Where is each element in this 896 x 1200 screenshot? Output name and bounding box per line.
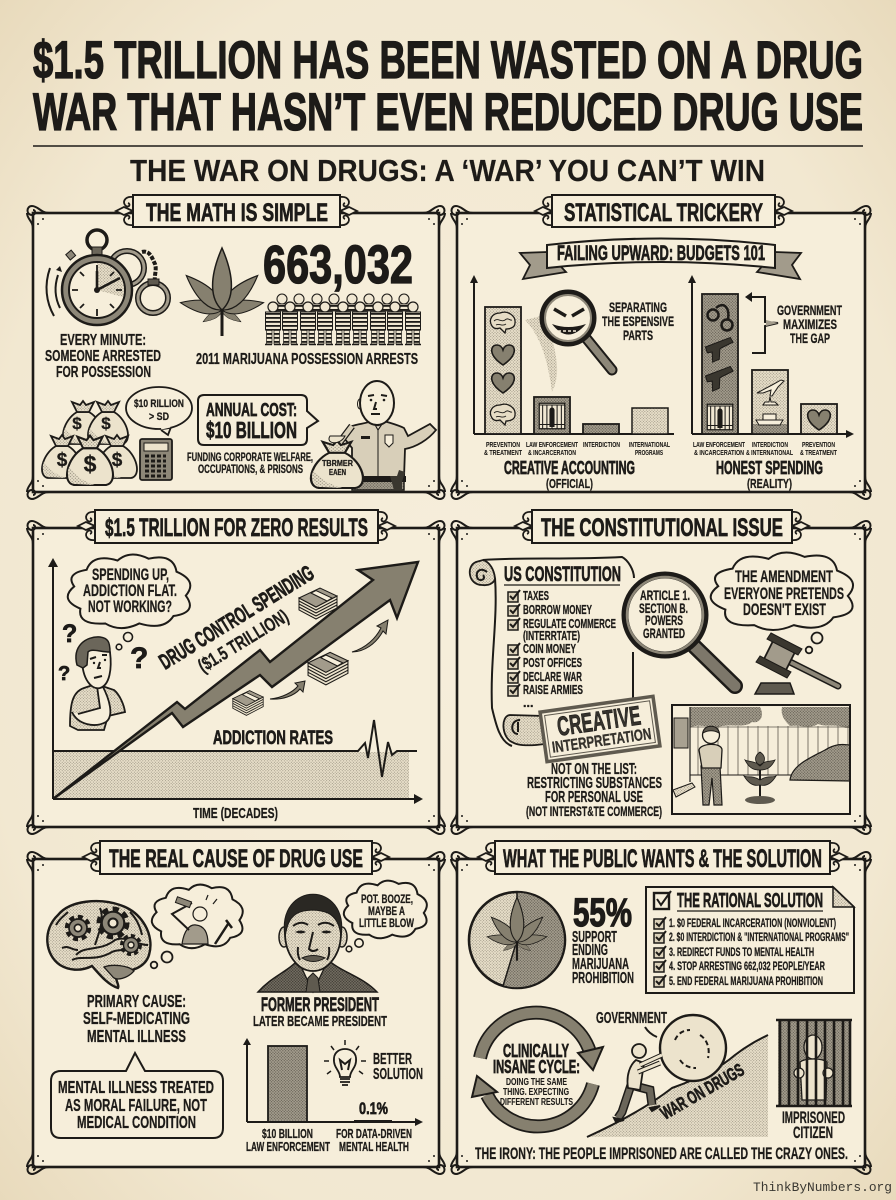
stat: 55% support: PROHIBITION [572, 970, 634, 987]
heading: the math is simple: THE MATH IS SIMPLE [146, 199, 328, 227]
text: not on the list: (NOT INTERST&TE COMMERCE) [526, 803, 662, 819]
thought bubble: pot booze: LITTLE BLOW [359, 916, 414, 930]
icon: light bulb better solution: SOLUTION [373, 1066, 423, 1083]
stat: 55% support: MARIJUANA [572, 956, 629, 973]
thought bubble: the amendment: DOESN'T EXIST [743, 600, 826, 619]
thought bubble: the amendment [711, 552, 853, 653]
icon: police officer with money bag [311, 381, 436, 490]
caption: imprisoned citizen [782, 1109, 845, 1142]
stat: 55% support: SUPPORT [572, 929, 617, 946]
panel: statistical trickery [451, 195, 871, 499]
icon: confused person [58, 620, 148, 730]
chart: 55% pie with leaf [469, 892, 565, 988]
caption: honest spending [716, 458, 823, 491]
heading: statistical trickery [535, 195, 792, 227]
caption: funding: OCCUPATIONS, & PRISONS [198, 462, 303, 476]
bracket arrow: maximizes the gap [745, 292, 778, 353]
caption: funding: FUNDING CORPORATE WELFARE, [187, 450, 313, 464]
panel: the constitutional issue [451, 510, 871, 834]
scroll: us constitution: US CONSTITUTION [504, 563, 621, 586]
icon: marijuana leaf [179, 248, 265, 336]
thought bubble: pot booze: MAYBE A [368, 904, 405, 918]
document: the rational solution [646, 887, 854, 993]
heading: the real cause of drug use: THE REAL CAUSE OF DRUG USE [109, 845, 363, 873]
thought bubble: spending up [68, 554, 190, 650]
source credit: ThinkByNumbers.org [753, 1180, 892, 1195]
caption: funding [187, 450, 313, 476]
label: addiction rates: ADDICTION RATES [213, 728, 333, 749]
thought bubble: pot booze [344, 881, 427, 952]
scroll: us constitution: (INTERRTATE) [523, 629, 580, 643]
scroll: us constitution: RAISE ARMIES [523, 683, 583, 697]
labels: left chart axis: LAW ENFORCEMENT [526, 440, 578, 449]
labels: right chart axis: LAW ENFORCEMENT [693, 440, 745, 449]
icon: money bags: $ [57, 450, 68, 471]
diagram: clinically insane cycle [472, 1013, 603, 1126]
text: not on the list [526, 761, 662, 819]
labels: left chart axis: PREVENTION [486, 440, 520, 449]
thought bubble: spending up: NOT WORKING? [88, 597, 172, 616]
caption: honest spending: (REALITY) [747, 476, 792, 491]
icon: calculator [140, 439, 172, 480]
icon: money bags: $ [84, 451, 97, 477]
text: not on the list: RESTRICTING SUBSTANCES [527, 775, 662, 792]
arrow: drug control spending [53, 562, 418, 799]
icon: brain with gears [47, 901, 150, 988]
icon: police officer with money bag: EAEN [329, 468, 346, 477]
scroll: us constitution: POST OFFICES [523, 656, 582, 670]
stamp: creative interpretation: CREATIVE [555, 700, 643, 742]
scroll: us constitution: ... [523, 696, 533, 710]
caption: imprisoned citizen: IMPRISONED [782, 1109, 845, 1127]
labels: right chart axis: & INCARCERATION [694, 448, 744, 457]
icon: stopwatch with handcuffs [47, 230, 168, 325]
stamp: creative interpretation [540, 696, 660, 762]
caption: every minute: EVERY MINUTE: [60, 332, 146, 349]
chart: law enforcement vs mental health: LAW ENFORCEMENT [246, 1139, 330, 1154]
labels: left chart axis: & INCARCERATION [528, 448, 576, 457]
chart: law enforcement vs mental health: 0.1% [359, 1099, 388, 1118]
caption: creative accounting: CREATIVE ACCOUNTING [504, 458, 635, 478]
scroll: us constitution: REGULATE COMMERCE [523, 617, 616, 631]
heading: the math is simple [116, 195, 357, 227]
caption: every minute: FOR POSSESSION [56, 364, 151, 381]
labels: right chart axis [693, 440, 837, 457]
subtitle: THE WAR ON DRUGS: A ‘WAR’ YOU CAN’T WIN [130, 153, 765, 188]
thought bubble: self medication [151, 885, 243, 968]
callout: mental illness treated: MENTAL ILLNESS TREATED [58, 1077, 214, 1097]
heading: the real cause of drug use [83, 841, 389, 874]
scroll: us constitution: BORROW MONEY [523, 603, 592, 617]
callout: annual cost: $10 BILLION [206, 417, 297, 443]
thought bubble: pot booze: POT. BOOZE, [361, 892, 413, 906]
label: separating: SEPARATING [609, 299, 667, 315]
heading: $1.5 trillion for zero results: $1.5 TRILLION FOR ZERO RESULTS [105, 514, 368, 542]
icon: police officer with money bag: TBRMER [322, 459, 353, 468]
diagram: clinically insane cycle: THING. EXPECTING [503, 1087, 569, 1098]
label: separating: PARTS [623, 327, 653, 343]
label: separating [602, 299, 674, 343]
caption: former president: FORMER PRESIDENT [261, 995, 379, 1016]
caption: former president [253, 995, 387, 1030]
callout: mental illness treated [51, 1053, 223, 1138]
labels: left chart axis: & TREATMENT [484, 448, 522, 457]
illustration: backyard plant [672, 705, 850, 814]
label: government maximizes the gap: THE GAP [790, 330, 830, 346]
label: government maximizes the gap: MAXIMIZES [783, 316, 837, 332]
icon: light bulb better solution: BETTER [373, 1051, 412, 1068]
labels: left chart axis [484, 440, 670, 457]
thought bubble: the amendment: THE AMENDMENT [735, 567, 833, 586]
labels: left chart axis: PROGRAMS [635, 448, 663, 457]
labels: left chart axis: INTERNATIONAL [629, 440, 670, 449]
caption: marijuana arrests: 2011 MARIJUANA POSSESSION ARRESTS [196, 351, 418, 368]
stat: 55% support: ENDING [572, 942, 608, 959]
chart: law enforcement vs mental health: FOR DATA-DRIVEN [336, 1126, 412, 1141]
chart: law enforcement vs mental health [243, 1038, 423, 1154]
diagram: clinically insane cycle: DOING THE SAME [506, 1077, 567, 1088]
icon: magnifier on article 1: SECTION B. [639, 601, 688, 616]
heading: statistical trickery: STATISTICAL TRICKERY [564, 199, 763, 227]
label: drug control spending: ($1.5 TRILLION) [195, 606, 293, 677]
speech bubble: $10 rillion [126, 387, 192, 435]
caption: primary cause: SELF-MEDICATING [83, 1008, 190, 1028]
icon: magnifier with grinning face [525, 292, 612, 392]
chart: law enforcement vs mental health: $10 BILLION [262, 1126, 313, 1141]
stat: 55% support [572, 891, 634, 987]
illustration: sisyphus pushing boulder [587, 1015, 768, 1137]
chart: spending vs addiction [48, 558, 423, 804]
label: government maximizes the gap: GOVERNMENT [777, 302, 842, 318]
scroll: us constitution: DECLARE WAR [523, 670, 582, 684]
icon: cash stacks and arrows [233, 588, 388, 715]
icon: gavel [755, 633, 838, 694]
icon: confused person: ? [62, 620, 77, 648]
icon: confused person: ? [130, 642, 148, 675]
caption: primary cause [83, 991, 190, 1046]
illustration: sisyphus pushing boulder: WAR ON DRUGS [657, 1060, 748, 1123]
labels: left chart axis: INTERDICTION [583, 440, 620, 449]
icon: money bags: $ [112, 450, 123, 471]
caption: honest spending: HONEST SPENDING [716, 458, 823, 478]
thought bubble: spending up: ADDICTION FLAT. [83, 581, 177, 600]
scroll: us constitution [470, 557, 634, 746]
labels: right chart axis: & TREATMENT [800, 448, 837, 457]
thought bubble: spending up: SPENDING UP, [92, 565, 169, 584]
text: not on the list: FOR PERSONAL USE [545, 789, 643, 806]
diagram: clinically insane cycle: CLINICALLY [503, 1041, 569, 1061]
heading: the constitutional issue: THE CONSTITUTIONAL ISSUE [541, 514, 783, 542]
callout: mental illness treated: AS MORAL FAILURE, NOT [65, 1095, 207, 1115]
panel: what the public wants and the solution [451, 841, 871, 1174]
label: government maximizes the gap [777, 302, 842, 346]
title [33, 31, 863, 142]
caption: every minute: SOMEONE ARRESTED [45, 348, 161, 365]
ribbon: failing upward [520, 238, 801, 279]
panel: $1.5 trillion for zero results [27, 510, 445, 834]
speech bubble: $10 rillion: > SD [149, 411, 169, 423]
heading: $1.5 trillion for zero results [78, 510, 395, 543]
illustration: imprisoned citizen [776, 1020, 852, 1107]
text: not on the list: NOT ON THE LIST: [551, 761, 637, 778]
icon: money bags: $ [101, 414, 111, 433]
speech bubble: $10 rillion: $10 RILLION [134, 398, 184, 410]
icon: money bags: $ [72, 414, 82, 433]
caption: primary cause: PRIMARY CAUSE: [87, 991, 186, 1011]
portrait: former president [258, 894, 377, 992]
icon: magnifier on article 1: GRANTED [643, 626, 685, 641]
callout: mental illness treated: MEDICAL CONDITION [77, 1112, 196, 1132]
number: 663,032: 663,032 [263, 235, 413, 295]
labels: right chart axis: & INTERNATIONAL [746, 448, 793, 457]
labels: right chart axis: PREVENTION [802, 440, 835, 449]
panel: the math is simple [27, 195, 445, 499]
label: government [596, 1010, 667, 1037]
label: government: GOVERNMENT [596, 1010, 667, 1027]
callout: annual cost: ANNUAL COST: [206, 400, 297, 420]
caption: primary cause: MENTAL ILLNESS [87, 1026, 186, 1046]
panel: the real cause of drug use [27, 841, 445, 1174]
heading: the constitutional issue [515, 510, 809, 543]
icon: rows of prisoners [265, 294, 421, 344]
labels: right chart axis: INTERDICTION [752, 440, 788, 449]
scroll: us constitution: COIN MONEY [523, 642, 576, 656]
icon: magnifier on article 1: POWERS [645, 613, 683, 628]
diagram: clinically insane cycle: INSANE CYCLE: [493, 1057, 580, 1077]
chart: law enforcement vs mental health: MENTAL HEALTH [339, 1139, 409, 1154]
caption: creative accounting: (OFFICIAL) [546, 476, 593, 491]
label: separating: THE ESPENSIVE [602, 313, 674, 329]
label: drug control spending [155, 560, 318, 677]
stat: 55% support: 55% [573, 891, 632, 935]
stamp: creative interpretation: INTERPRETATION [551, 726, 652, 757]
caption: imprisoned citizen: CITIZEN [793, 1124, 833, 1142]
axis label: time: TIME (DECADES) [193, 805, 278, 822]
caption: creative accounting [504, 458, 635, 491]
chart: creative accounting bars [470, 275, 674, 434]
icon: magnifier on article 1 [625, 575, 735, 686]
label: drug control spending: DRUG CONTROL SPENDING [155, 560, 318, 674]
icon: magnifier on article 1: ARTICLE 1. [640, 588, 690, 603]
callout: annual cost [198, 395, 318, 445]
scroll: us constitution: TAXES [523, 589, 549, 603]
ribbon: failing upward: FAILING UPWARD: BUDGETS 101 [557, 242, 765, 265]
icon: light bulb better solution [324, 1040, 423, 1085]
caption: every minute [45, 332, 161, 381]
icon: confused person: ? [58, 663, 70, 685]
icon: money bags [42, 401, 137, 485]
caption: former president: LATER BECAME PRESIDENT [253, 1013, 387, 1030]
diagram: clinically insane cycle: DIFFERENT RESULTS [500, 1097, 573, 1108]
chart: honest spending bars [688, 275, 854, 438]
